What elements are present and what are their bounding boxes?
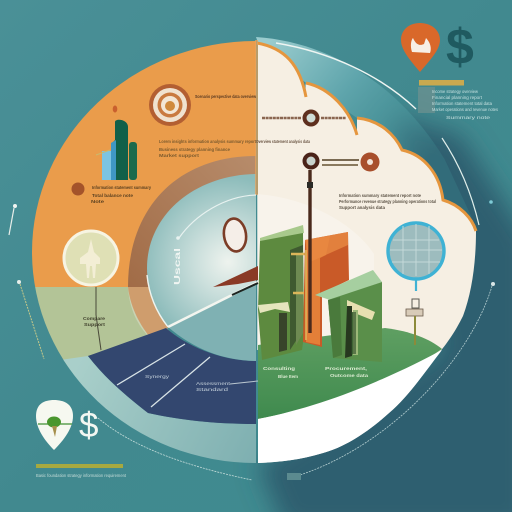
icon: lighthouse badge	[64, 231, 118, 350]
panel: sage quadrant	[35, 287, 169, 368]
icon: left decoration tick	[9, 204, 17, 235]
arc: lower right dotted line	[287, 282, 495, 480]
text block: orange paragraph	[159, 139, 256, 158]
icon: target rings	[149, 84, 191, 126]
text block: chart caption: Information statement summary	[92, 185, 151, 190]
text: sage label: Support	[84, 322, 106, 327]
text block: cream paragraph: Performance revenue strategy planning operations total	[339, 199, 436, 204]
icon: node row second	[302, 152, 380, 172]
divider lines on navy band	[117, 344, 210, 407]
text: floor labels	[263, 366, 369, 379]
text block: orange paragraph: Business strategy planning finance	[159, 147, 230, 152]
icon: green map pin	[36, 400, 73, 450]
icon: globe on pin	[388, 223, 444, 345]
text: sage label: Compare	[83, 316, 106, 321]
text block: top right legend: Market operations and revenue notes	[432, 107, 499, 112]
text block: cream paragraph	[339, 193, 436, 210]
text block: orange paragraph: Market support	[159, 153, 200, 158]
text block: top right legend: Information statement total data	[432, 101, 492, 106]
text block: top right legend	[418, 80, 499, 120]
icon: right green building	[315, 270, 382, 362]
text block: top right legend: Financial planning report	[432, 95, 483, 100]
icon: small dot right	[489, 200, 493, 204]
panel: pale teal outer band	[60, 356, 256, 470]
panel: brown ring	[128, 156, 256, 287]
arc: left dotted line	[17, 280, 44, 359]
icon: dollar sign dark: $	[446, 19, 474, 75]
icon: orange map pin	[401, 23, 440, 72]
text block: chart caption	[91, 185, 151, 204]
text: navy labels: Synergy	[145, 374, 170, 379]
arc label in inner circle: Uscal	[173, 248, 182, 285]
text block: chart caption: Note	[91, 199, 105, 204]
panel: left half of circle	[32, 41, 256, 463]
text: target heading: Scenario perspective data overview	[195, 94, 256, 99]
arc: lower dotted line from dollar	[98, 418, 252, 480]
text block: cream paragraph: Support analysis data	[339, 205, 385, 210]
text: row line: Overview statement analysis data	[256, 139, 310, 144]
text: sage label	[83, 316, 106, 327]
panel: navy band	[88, 328, 256, 424]
inner pale circle	[147, 174, 258, 327]
icon: brown dot	[72, 182, 84, 196]
icon: orange building	[303, 232, 349, 347]
legend bar and caption: Basic foundation strategy information requirement	[36, 473, 127, 478]
legend bar and caption	[36, 464, 127, 478]
arc: right white line	[442, 138, 479, 225]
white band	[258, 350, 442, 463]
icon: oval badge	[222, 217, 248, 253]
text block: top right legend: Income strategy overview	[432, 89, 479, 94]
icon: dollar sign white: $	[79, 406, 98, 445]
panel: tan ring lower part	[128, 287, 168, 336]
text: floor labels: Blue Item	[278, 374, 298, 379]
icon: left green building	[258, 225, 308, 360]
panel: upper right pale teal arc band	[256, 37, 472, 218]
inner lower wedge	[168, 282, 258, 361]
inner light arc	[257, 194, 374, 350]
text block: chart caption: Total balance note	[92, 193, 134, 198]
text: floor labels: Consulting	[263, 366, 295, 371]
bar chart	[96, 106, 137, 180]
icon: pole	[306, 170, 313, 340]
center divider	[255, 40, 258, 195]
panel: right cream scalloped half	[257, 43, 476, 463]
icon: node row top	[262, 110, 346, 126]
text: navy labels: Assessment	[196, 381, 231, 386]
text: navy labels: Standard	[196, 387, 229, 392]
text block: orange paragraph: Lorem insights information analysis summary report	[159, 139, 256, 144]
text: floor labels: Outcome data	[330, 373, 369, 378]
inner circle white edge	[147, 275, 168, 327]
text: floor labels: Procurement,	[325, 366, 367, 371]
panel: pale ring edge	[128, 288, 148, 335]
arc label in inner circle	[173, 195, 256, 285]
green floor	[258, 328, 442, 419]
navy pointer line	[230, 381, 258, 384]
text block: top right legend: Summary note	[446, 115, 491, 120]
arc: upper right white line	[276, 43, 416, 109]
scalloped orange edge	[257, 43, 476, 231]
text: navy labels	[145, 374, 231, 392]
panel: orange quadrant	[32, 41, 256, 287]
arrow: compass needle and line	[168, 266, 258, 327]
text block: cream paragraph: Information summary statement report note	[339, 193, 421, 198]
